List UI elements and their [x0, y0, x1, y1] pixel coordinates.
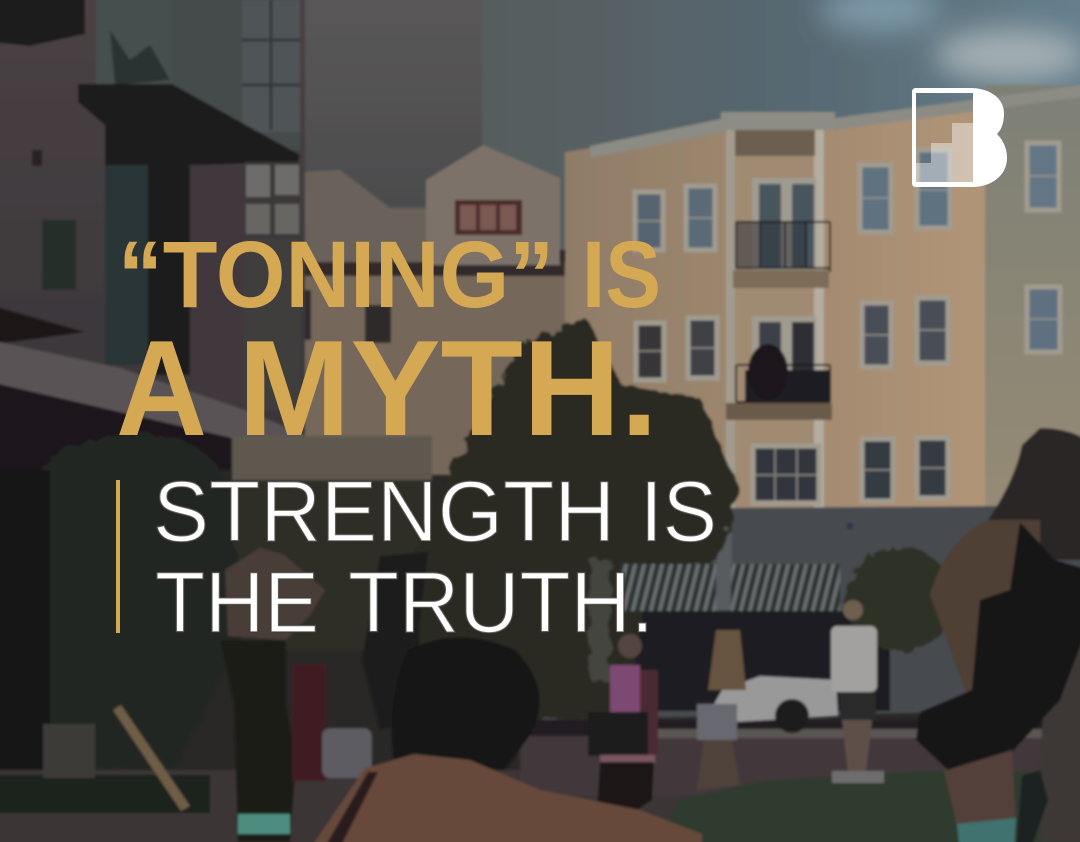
planter	[43, 724, 95, 778]
ground and walkway	[0, 770, 1080, 842]
accent bar	[116, 480, 120, 633]
left modern building	[0, 0, 345, 476]
headline: a myth: A	[116, 312, 207, 464]
subhead: the truth: TRUTH.	[348, 555, 654, 651]
subhead: the truth	[155, 555, 654, 651]
clouds	[820, 0, 1080, 81]
apartment windows	[635, 143, 1060, 503]
midground buildings	[300, 170, 590, 475]
white car	[700, 676, 838, 733]
far trees	[845, 548, 955, 652]
balcony railings	[726, 222, 832, 420]
subhead: the truth: THE	[155, 555, 319, 651]
exerciser with skirt	[697, 630, 746, 790]
left dark bushes	[0, 470, 50, 800]
seated woman in foreground	[308, 638, 702, 842]
lawn	[650, 771, 1080, 842]
palm and tree silhouette	[410, 318, 740, 720]
strip behind the hedge	[232, 436, 432, 486]
subhead: strength is: STRENGTH	[153, 464, 615, 560]
gabled building	[426, 145, 560, 265]
peach apartment building	[565, 84, 1080, 525]
logo: stepped B mark	[912, 88, 1007, 187]
striped awnings	[620, 564, 840, 611]
tall grey wall	[295, 0, 482, 250]
pink top exerciser	[588, 634, 658, 812]
sky	[470, 0, 1080, 250]
dark hedge	[30, 434, 240, 770]
headline: "Toning" is: “TONING”	[118, 222, 554, 328]
dark zone behind the class	[232, 480, 432, 650]
headline: "Toning" is: IS	[582, 222, 661, 328]
second exerciser	[362, 552, 428, 730]
headline: a myth: MYTH.	[238, 312, 658, 464]
man in white shirt	[831, 600, 884, 783]
balcony doors	[752, 178, 816, 404]
storefront band	[520, 506, 1080, 720]
subhead: strength is: IS	[640, 464, 717, 560]
woman at right	[916, 428, 1080, 842]
wooden brace	[113, 705, 190, 811]
white bag	[322, 728, 372, 778]
person in black with teal socks	[220, 548, 325, 842]
window mullions	[635, 176, 1060, 503]
person in red	[292, 664, 326, 781]
